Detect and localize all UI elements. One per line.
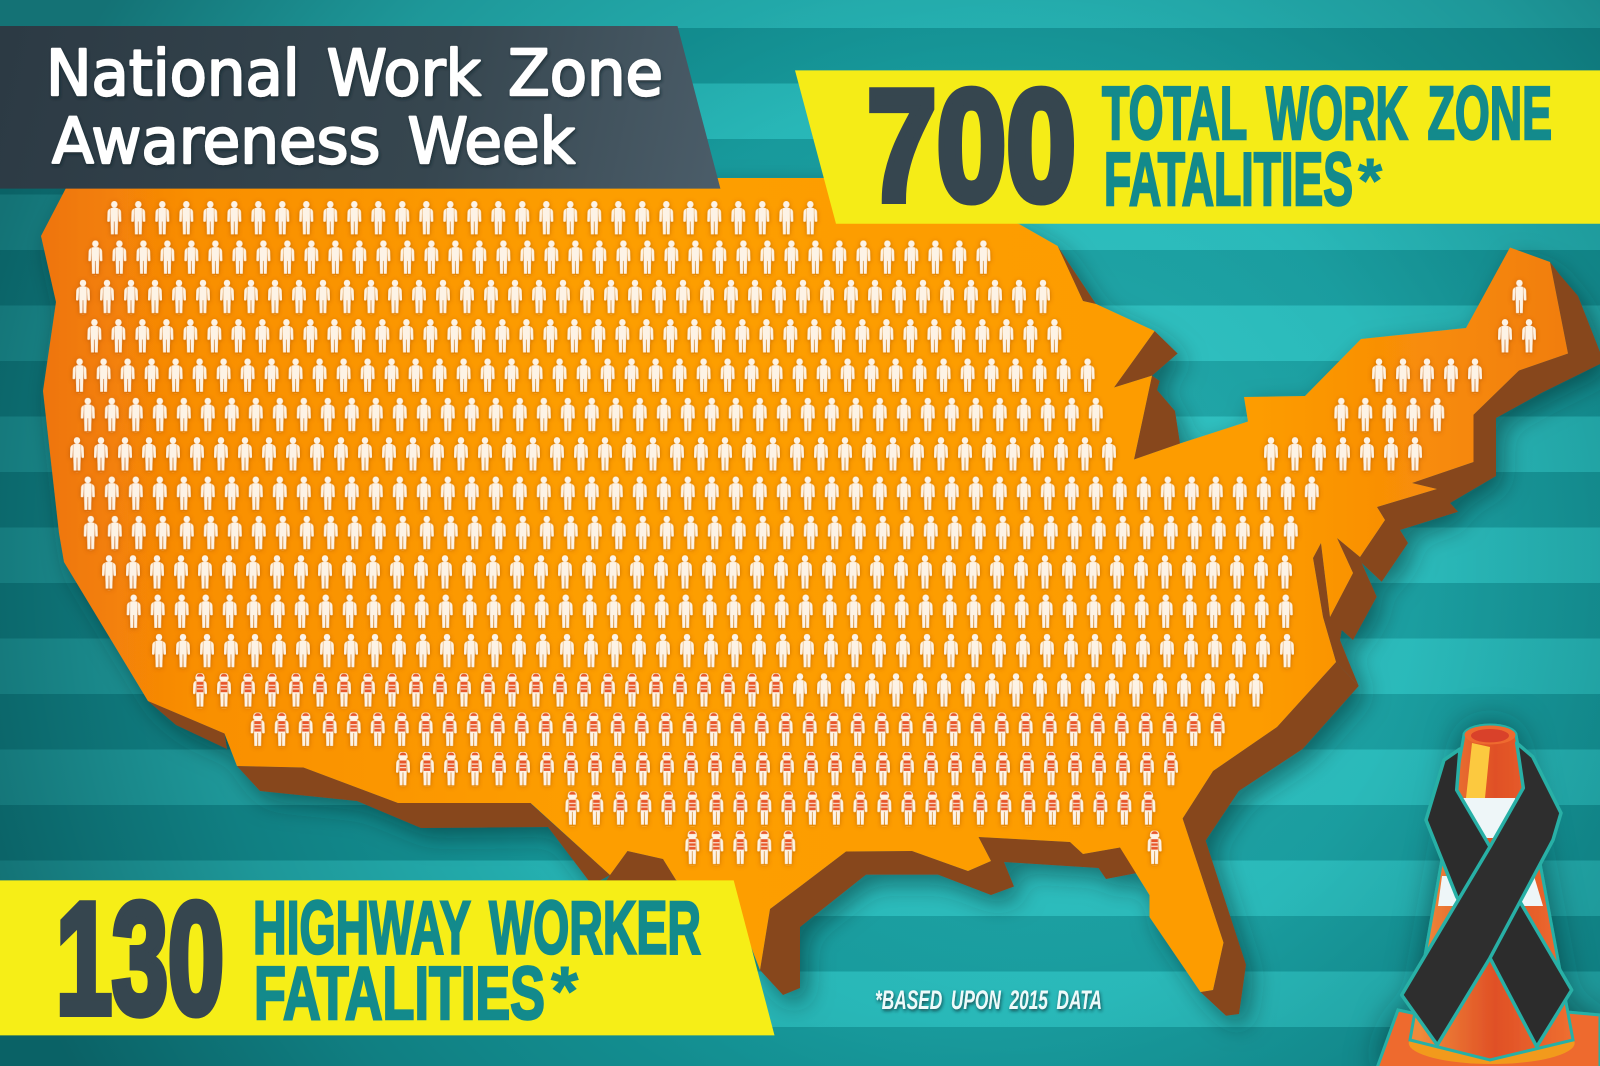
footnote: *BASED UPON 2015 DATA: [875, 985, 1102, 1015]
number 130: 130: [56, 871, 224, 1047]
row 4 general figures: [82, 319, 1066, 354]
yellow banner: [0, 880, 774, 1035]
Florida highway worker: [1143, 831, 1167, 866]
lower reflective band: [1438, 876, 1543, 906]
row 4 New England figures: [1493, 319, 1541, 354]
map orange top face: [41, 178, 1568, 992]
row 15 highway workers: [391, 752, 1183, 787]
row 9 general figures: [79, 516, 1303, 551]
title text: Awareness Week: [52, 105, 575, 178]
callout: 700 total work zone fatalities: [795, 58, 1600, 234]
row 6 general figures: [76, 398, 1108, 433]
row 17 highway workers: [680, 831, 800, 866]
cone mouth: [1471, 729, 1509, 742]
number 700: 700: [867, 58, 1076, 234]
heading: highway worker: HIGHWAY WORKER: [253, 886, 701, 970]
row 2 general figures: [83, 240, 995, 275]
title text: [46, 37, 663, 178]
row 8 general figures: [76, 476, 1324, 511]
row 5 general figures: [68, 358, 1100, 393]
traffic cone: [1377, 724, 1600, 1066]
row 6 northeast figures: [1329, 398, 1449, 433]
cone top outline: [1462, 724, 1518, 746]
map of the United States: [41, 178, 1600, 1016]
cone base: [1377, 1010, 1600, 1066]
upper reflective band: [1452, 798, 1526, 838]
icon: traffic cone with black ribbon: [1377, 724, 1600, 1066]
callout: 130 highway worker fatalities: [0, 871, 774, 1047]
cone highlight: [1466, 743, 1490, 798]
row 12 general figures: [147, 634, 1299, 669]
title text: National Work Zone: [46, 37, 663, 110]
row 11 general figures: [122, 594, 1298, 630]
row 1 general figures: [102, 201, 822, 236]
heading: fatalities: FATALITIES: [1104, 137, 1353, 221]
asterisk: *: [1358, 147, 1383, 216]
people pictogram: 700 fatalities: [65, 201, 1541, 866]
title banner: [0, 26, 720, 189]
row 3 New England figure: [1507, 280, 1531, 315]
heading: fatalities: FATALITIES: [254, 951, 545, 1035]
cone base ring: [1409, 1022, 1575, 1064]
row 16 highway workers: [560, 791, 1160, 826]
title background: [0, 26, 720, 189]
row 7 general figures: [65, 437, 1121, 472]
ribbon left band: [1426, 749, 1572, 1047]
yellow banner: [795, 70, 1600, 224]
asterisk: *: [551, 952, 579, 1030]
cone rim: [1464, 726, 1516, 744]
row 13 general figures: [788, 673, 1268, 708]
row 10 general figures: [97, 555, 1297, 590]
row 7 northeast figures: [1259, 437, 1427, 472]
row 3 general figures: [71, 280, 1055, 315]
row 5 New England figures: [1367, 358, 1487, 393]
map extruded brown edge: [148, 246, 1600, 1016]
cone body: [1410, 735, 1573, 1060]
ribbon right band: [1402, 743, 1561, 1045]
row 13 highway workers: [188, 673, 788, 708]
row 14 highway workers: [246, 713, 1230, 748]
